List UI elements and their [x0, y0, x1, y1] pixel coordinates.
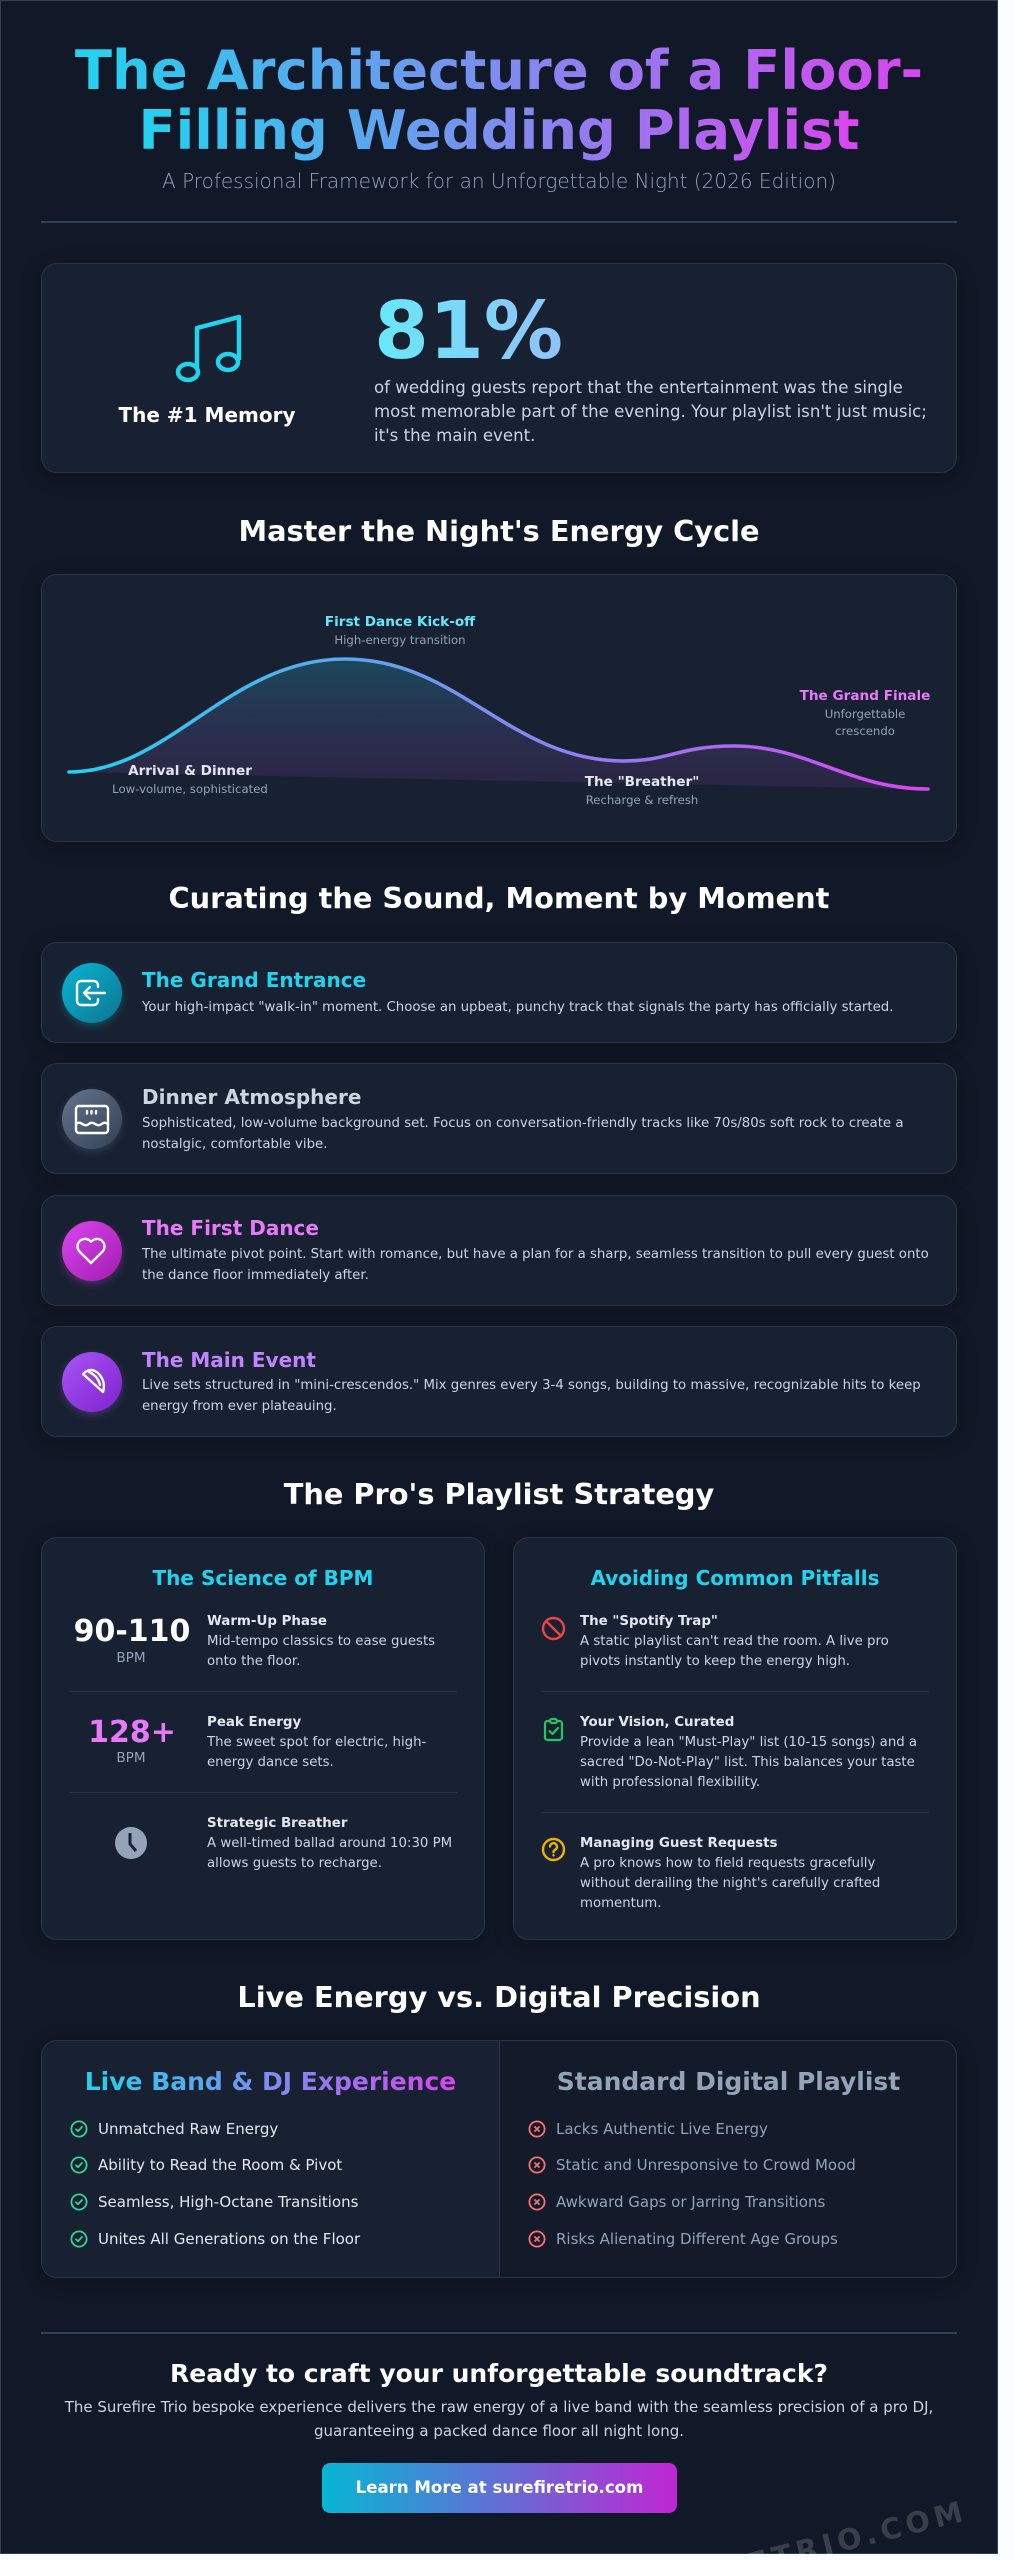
stat number — [374, 283, 930, 379]
label: arrival: Arrival & Dinner — [128, 763, 252, 779]
panel heading: pitfalls: Avoiding Common Pitfalls — [590, 1566, 880, 1590]
title: main event: The Main Event — [142, 1348, 316, 1372]
icon: dinner — [62, 1089, 122, 1149]
text: main event: energy from ever plateauing. — [142, 1398, 337, 1414]
icon: entrance — [62, 963, 122, 1023]
item: Seamless, High-Octane Transitions — [98, 2193, 358, 2211]
text: spotify trap: A static playlist can't read the room. A live pro — [580, 1634, 889, 1649]
text: spotify trap: pivots instantly to keep the energy high. — [580, 1654, 850, 1669]
note: grand finale: crescendo — [835, 724, 895, 738]
check icon — [70, 2156, 88, 2174]
stat description: it's the main event. — [374, 426, 535, 445]
title: The Architecture of a Floor- — [75, 39, 923, 102]
item: Unites All Generations on the Floor — [98, 2230, 360, 2248]
CTA text: guaranteeing a packed dance floor all night long. — [314, 2422, 684, 2440]
panel: main event — [41, 1326, 957, 1437]
panel: comparison — [41, 2040, 957, 2278]
stat description — [374, 378, 927, 445]
heading: peak: Peak Energy — [207, 1715, 301, 1730]
panel: first dance — [41, 1195, 957, 1306]
panel: stat — [41, 263, 957, 473]
note: first dance: High-energy transition — [334, 633, 466, 647]
note: grand finale — [825, 707, 905, 738]
heading: moments: Curating the Sound, Moment by Moment — [169, 881, 829, 915]
title — [75, 39, 923, 162]
item: Static and Unresponsive to Crowd Mood — [556, 2156, 856, 2174]
stat description: most memorable part of the evening. Your playlist isn't just music; — [374, 402, 927, 421]
digital list — [528, 2120, 856, 2248]
text: dinner — [142, 1116, 903, 1152]
unit: peak BPM: BPM — [116, 1750, 146, 1766]
text: your vision: Provide a lean "Must-Play" list (10-15 songs) and a — [580, 1735, 917, 1750]
heading: energy cycle: Master the Night's Energy Cycle — [238, 514, 760, 548]
icon: main event — [62, 1352, 122, 1412]
cross icon — [528, 2230, 546, 2248]
text: your vision: sacred "Do-Not-Play" list. This balances your taste — [580, 1755, 915, 1770]
icon: ban — [542, 1616, 566, 1640]
note: breather: Recharge & refresh — [586, 793, 698, 807]
stat description: of wedding guests report that the entertainment was the single — [374, 378, 903, 397]
heading: guest requests: Managing Guest Requests — [580, 1836, 777, 1851]
text: guest requests: momentum. — [580, 1896, 661, 1911]
text: first dance: The ultimate pivot point. Start with romance, but have a plan for a sharp, seamless transition to pull every guest onto — [142, 1247, 929, 1262]
icon: heart — [62, 1221, 122, 1281]
text: guest requests: without derailing the night's carefully crafted — [580, 1876, 880, 1891]
text: first dance: the dance floor immediately after. — [142, 1268, 369, 1282]
text: warm-up — [207, 1634, 435, 1669]
panel: energy cycle — [41, 574, 957, 842]
panel heading: BPM: The Science of BPM — [153, 1566, 373, 1590]
heading: your vision: Your Vision, Curated — [580, 1715, 734, 1730]
number: warm-up BPM: 90-110 — [74, 1614, 190, 1649]
panel: live column — [42, 2041, 500, 2277]
item: Risks Alienating Different Age Groups — [556, 2230, 838, 2248]
check icon — [70, 2194, 88, 2210]
number: peak BPM: 128+ — [88, 1715, 176, 1750]
column heading: digital: Standard Digital Playlist — [557, 2067, 900, 2096]
heading: breather: Strategic Breather — [207, 1816, 348, 1831]
text: first dance — [142, 1247, 929, 1282]
text: warm-up: onto the floor. — [207, 1654, 300, 1669]
label: first dance: First Dance Kick-off — [325, 614, 475, 630]
text: peak — [206, 1735, 426, 1770]
check icon — [70, 2120, 88, 2138]
panel: dinner — [41, 1063, 957, 1174]
text: main event: Live sets structured in "mini-crescendos." Mix genres every 3-4 songs, building to massive, recognizable hits to keep — [142, 1378, 921, 1393]
heading: comparison: Live Energy vs. Digital Precision — [237, 1980, 761, 2014]
item: Awkward Gaps or Jarring Transitions — [556, 2193, 825, 2211]
button: Learn More at surefiretrio.com — [356, 2478, 643, 2497]
subtitle: A Professional Framework for an Unforgettable Night (2026 Edition) — [162, 169, 836, 193]
text: warm-up: Mid-tempo classics to ease guests — [207, 1634, 435, 1649]
CTA heading: Ready to craft your unforgettable soundtrack? — [170, 2359, 828, 2388]
icon: clipboard — [544, 1718, 564, 1742]
live list — [70, 2120, 360, 2248]
label: grand finale: The Grand Finale — [800, 688, 930, 704]
button — [322, 2463, 677, 2513]
heading: spotify trap: The "Spotify Trap" — [580, 1614, 718, 1629]
icon: clock — [115, 1827, 147, 1859]
title: grand entrance: The Grand Entrance — [142, 968, 366, 992]
heading: strategy: The Pro's Playlist Strategy — [284, 1477, 714, 1511]
text: breather: A well-timed ballad around 10:30 PM — [207, 1836, 452, 1851]
item: Ability to Read the Room & Pivot — [98, 2156, 342, 2174]
unit: warm-up BPM: BPM — [116, 1650, 146, 1666]
text: peak: energy dance sets. — [207, 1755, 334, 1770]
title: first dance: The First Dance — [142, 1216, 319, 1240]
column heading: live: Live Band & DJ Experience — [85, 2067, 456, 2096]
item: Unmatched Raw Energy — [98, 2120, 278, 2138]
title: dinner: Dinner Atmosphere — [142, 1085, 361, 1109]
heading: warm-up: Warm-Up Phase — [207, 1614, 327, 1629]
stat label: The #1 Memory — [118, 403, 296, 427]
cross icon — [528, 2156, 546, 2174]
cross icon — [528, 2194, 546, 2210]
text: guest requests — [580, 1856, 880, 1911]
text: dinner: nostalgic, comfortable vibe. — [142, 1136, 327, 1152]
note: grand finale: Unforgettable — [825, 707, 905, 721]
cross icon — [528, 2120, 546, 2138]
panel: pitfalls — [513, 1537, 957, 1940]
chart: energy curve — [67, 657, 930, 791]
text: main event — [142, 1378, 921, 1414]
panel: grand entrance — [41, 942, 957, 1043]
label: breather: The "Breather" — [585, 774, 699, 790]
text: your vision — [580, 1735, 917, 1790]
note: arrival: Low-volume, sophisticated — [112, 782, 268, 796]
CTA text: The Surefire Trio bespoke experience delivers the raw energy of a live band with the seamless precision of a pro DJ, — [65, 2398, 933, 2416]
CTA text — [64, 2398, 933, 2440]
text: breather: allows guests to recharge. — [207, 1856, 382, 1871]
text: dinner: Sophisticated, low-volume background set. Focus on conversation-friendly tracks like 70s/80s soft rock to create a — [142, 1116, 903, 1131]
text: your vision: with professional flexibility. — [580, 1775, 760, 1790]
check icon — [70, 2230, 88, 2248]
text: grand entrance: Your high-impact "walk-in" moment. Choose an upbeat, punchy track that signals the party has officially started. — [142, 1000, 893, 1015]
stat number: 81% — [374, 285, 563, 377]
text: peak: The sweet spot for electric, high- — [207, 1735, 426, 1750]
icon: question — [542, 1838, 566, 1862]
item: Lacks Authentic Live Energy — [556, 2120, 768, 2138]
panel: BPM — [41, 1537, 485, 1940]
title: Filling Wedding Playlist — [138, 99, 860, 162]
text: guest requests: A pro knows how to field requests gracefully — [580, 1856, 875, 1871]
text: spotify trap — [580, 1634, 889, 1669]
text: breather — [207, 1836, 452, 1871]
icon: music note — [176, 314, 242, 382]
